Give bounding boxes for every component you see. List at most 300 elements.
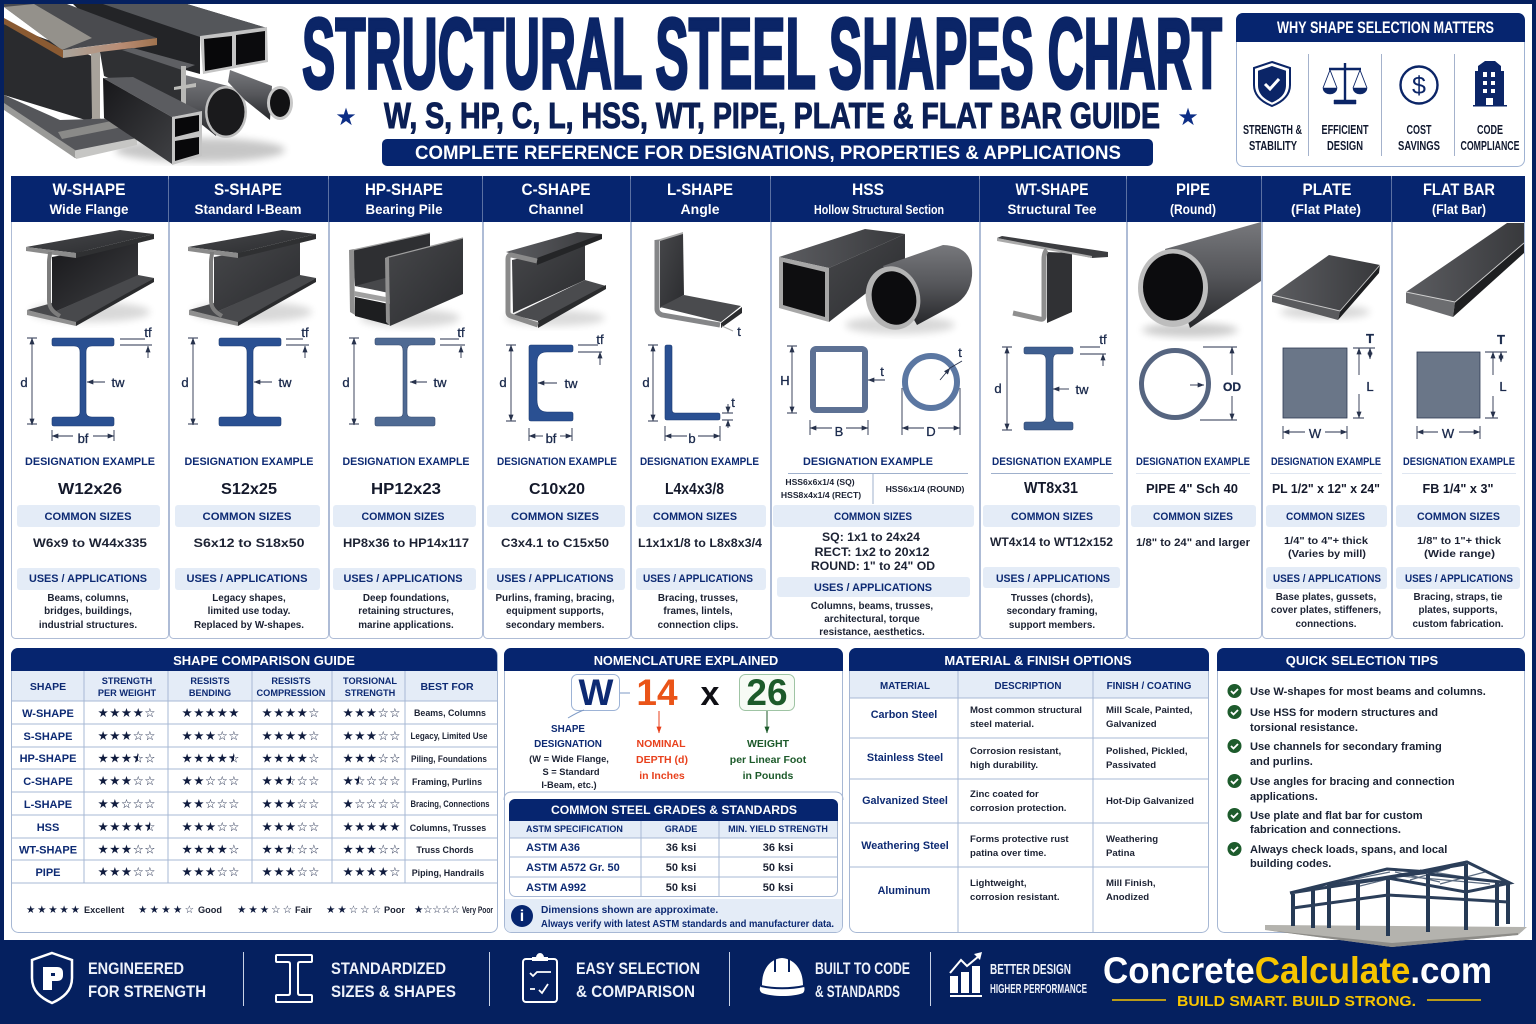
- HSS section diagrams: t: [958, 345, 962, 360]
- footer item: easy selection: EASY SELECTION: [576, 959, 700, 978]
- icon: dollar coin: $: [1412, 72, 1426, 100]
- panel: WT-shape: Structural Tee: [1008, 201, 1097, 217]
- L specifications text: frames, lintels,: [663, 606, 733, 617]
- comparison row: C-shape: ★★★☆☆: [98, 773, 156, 788]
- material table head: DESCRIPTION: [995, 681, 1061, 692]
- logo: ConcreteCalculate.com: ConcreteCalculate.com: [1103, 950, 1492, 991]
- HP section diagram: d: [342, 375, 350, 390]
- comparison row: pipe: ★★★☆☆: [182, 864, 240, 879]
- comparison row: S-shape: ★★★☆☆: [98, 728, 156, 743]
- comparison row: pipe: [35, 864, 484, 879]
- comparison row: HP-shape: ★★★☆☆: [98, 750, 156, 766]
- footer item: built to code: & STANDARDS: [815, 983, 900, 1001]
- icon: building: [1473, 61, 1507, 106]
- tip text: and purlins.: [1250, 756, 1313, 768]
- plate specifications text: [1266, 456, 1387, 630]
- material names: Carbon Steel: [871, 709, 937, 721]
- C specifications text: USES / APPLICATIONS: [496, 573, 614, 585]
- WT specifications text: secondary framing,: [1006, 606, 1098, 617]
- panel: why shape selection matters: [1236, 13, 1525, 166]
- W specifications text: USES / APPLICATIONS: [29, 573, 147, 585]
- S specifications text: Replaced by W-shapes.: [194, 620, 304, 631]
- S specifications text: limited use today.: [208, 606, 291, 617]
- flat bar specifications text: FB 1/4" x 3": [1422, 481, 1494, 496]
- designation W14x26: x: [701, 675, 720, 713]
- 3D flat bar: [1406, 223, 1524, 317]
- panel: L-shape: L-SHAPE: [667, 181, 733, 199]
- plate specifications text: USES / APPLICATIONS: [1273, 573, 1381, 585]
- table: common steel grades and standards: ASTM A992: [526, 882, 586, 894]
- HSS specifications text: Columns, beams, trusses,: [811, 601, 933, 612]
- flat bar specifications text: [1396, 456, 1520, 630]
- comparison row: C-shape: ★★☆☆☆: [262, 773, 320, 788]
- comparison row: HSS: ★★★★★: [342, 819, 400, 834]
- comparison table head: STRENGTH: [102, 676, 153, 686]
- why labels: COST: [1406, 122, 1432, 137]
- HSS specifications text: [773, 456, 974, 638]
- comparison row: WT-shape: [19, 842, 474, 856]
- C specifications text: [487, 456, 625, 631]
- tip text: Use HSS for modern structures and: [1250, 707, 1438, 719]
- plate specifications text: connections.: [1296, 619, 1357, 630]
- why labels: STABILITY: [1249, 138, 1297, 153]
- HSS specifications text: RECT: 1x2 to 20x12: [814, 545, 930, 559]
- comparison table head: STRENGTH: [345, 688, 396, 698]
- material finishes: Passivated: [1106, 760, 1156, 771]
- panel: W-shape: W-SHAPE: [52, 181, 126, 199]
- W section diagram: tf: [144, 325, 152, 340]
- comparison row: L-shape: ★★☆☆☆: [98, 796, 156, 811]
- 3D HSS tubes: [779, 229, 972, 336]
- star rating legend: Very Poor: [462, 905, 493, 915]
- comparison row: C-shape: Framing, Purlins: [412, 777, 482, 787]
- 3D pipe: [1138, 222, 1261, 337]
- comparison row: HP-shape: ★★★★☆: [262, 750, 320, 766]
- W explanation: [529, 724, 609, 790]
- star rating legend: ★★★★★: [26, 904, 80, 916]
- material descriptions: Lightweight,: [970, 878, 1027, 889]
- comparison row: pipe: ★★★☆☆: [98, 864, 156, 879]
- panel: HP-shape: HP-SHAPE: [365, 181, 443, 199]
- material descriptions: corrosion protection.: [970, 803, 1066, 814]
- 3D L-shape: t: [737, 324, 741, 339]
- 3D C-shape: [505, 232, 606, 328]
- 3D W-shape: [26, 230, 154, 326]
- footer bar: [0, 940, 1536, 1024]
- plate section diagram: L: [1366, 379, 1374, 394]
- icon: balance scale: [1323, 63, 1367, 104]
- material descriptions: [970, 705, 1082, 903]
- tip text: torsional resistance.: [1250, 722, 1358, 734]
- why labels: EFFICIENT: [1322, 122, 1369, 137]
- icon: dollar coin: [1400, 66, 1438, 104]
- table: common steel grades and standards: ASTM A36: [526, 842, 580, 854]
- plate specifications text: Base plates, gussets,: [1276, 592, 1376, 603]
- W specifications text: COMMON SIZES: [44, 511, 132, 523]
- flat bar specifications text: custom fabrication.: [1412, 619, 1504, 630]
- panel: flat bar: FLAT BAR: [1423, 181, 1495, 199]
- HSS section diagrams: B: [835, 424, 843, 439]
- comparison row: pipe: ★★★★☆: [342, 864, 400, 879]
- WT specifications text: support members.: [1009, 620, 1095, 631]
- comparison table head: SHAPE: [30, 681, 66, 693]
- why labels: CODE: [1477, 122, 1503, 137]
- star rating legend: Excellent: [84, 905, 124, 915]
- 26 explanation: WEIGHT: [747, 738, 790, 750]
- L section diagram: d: [642, 375, 650, 390]
- panel: C-shape: Channel: [528, 201, 584, 217]
- W specifications text: W12x26: [58, 481, 122, 498]
- subtitle with stars: ★: [1177, 104, 1199, 131]
- tip text: applications.: [1250, 791, 1318, 803]
- comparison row: W-shape: W-SHAPE: [22, 708, 74, 720]
- tip text: building codes.: [1250, 858, 1331, 870]
- footer item: better design: [950, 952, 1087, 997]
- HP specifications text: retaining structures,: [358, 606, 454, 617]
- pipe specifications text: DESIGNATION EXAMPLE: [1136, 456, 1250, 468]
- HSS specifications text: COMMON SIZES: [834, 511, 912, 523]
- C section diagram: [499, 332, 604, 446]
- C specifications text: C3x4.1 to C15x50: [501, 536, 609, 550]
- comparison table head: TORSIONAL: [343, 676, 397, 686]
- panel: flat bar: [1392, 176, 1525, 638]
- 3D L-shape: [655, 232, 742, 339]
- HSS specifications text: resistance, aesthetics.: [819, 627, 925, 638]
- material finishes: Patina: [1106, 848, 1135, 859]
- why labels: STRENGTH &: [1243, 122, 1302, 137]
- comparison table head: RESISTS: [271, 676, 311, 686]
- table: common steel grades and standards: MIN. YIELD STRENGTH: [728, 824, 828, 834]
- W section diagram: [20, 325, 152, 446]
- pipe specifications text: 1/8" to 24" and larger: [1136, 537, 1251, 549]
- plate section diagram: T: [1366, 331, 1374, 346]
- tip text: [1250, 686, 1486, 870]
- comparison table head: BENDING: [189, 688, 231, 698]
- star rating legend: ★★★★☆: [138, 904, 194, 916]
- star rating legend: ★☆☆☆☆: [414, 904, 460, 916]
- material names: Galvanized Steel: [862, 795, 948, 807]
- plate specifications text: 1/4" to 4"+ thick: [1284, 535, 1368, 547]
- panel: nomenclature explained: [504, 648, 843, 932]
- 3D S-shape: [188, 230, 316, 326]
- HP specifications text: HP8x36 to HP14x117: [343, 536, 469, 550]
- W specifications text: DESIGNATION EXAMPLE: [25, 456, 155, 468]
- material descriptions: Most common structural: [970, 705, 1082, 716]
- HSS section diagrams: H: [780, 373, 790, 388]
- HSS section diagrams: t: [880, 364, 884, 379]
- footer item: better design: HIGHER PERFORMANCE: [990, 981, 1087, 996]
- panel: plate: [1262, 176, 1392, 638]
- footer item: engineered for strength: ENGINEERED: [88, 959, 184, 978]
- tip text: Use angles for bracing and connection: [1250, 776, 1455, 788]
- comparison row: L-shape: Bracing, Connections: [410, 799, 490, 809]
- hero image: steel sections: [4, 4, 293, 165]
- L specifications text: DESIGNATION EXAMPLE: [640, 456, 759, 468]
- W specifications text: bridges, buildings,: [44, 606, 132, 617]
- table: common steel grades and standards: 50 ksi: [666, 882, 696, 894]
- star rating legend: Good: [198, 905, 222, 915]
- material names: Stainless Steel: [867, 752, 943, 764]
- footer item: standardized sizes: STANDARDIZED: [331, 959, 446, 978]
- comparison row: W-shape: ★★★☆☆: [342, 705, 400, 720]
- table: common steel grades and standards: GRADE: [665, 824, 697, 834]
- 26 explanation: in Pounds: [743, 770, 794, 782]
- S section diagram: tw: [278, 375, 292, 390]
- reference banner: COMPLETE REFERENCE FOR DESIGNATIONS, PROPERTIES & APPLICATIONS: [415, 143, 1121, 164]
- material table head: MATERIAL: [880, 681, 930, 692]
- tip text: Use plate and flat bar for custom: [1250, 810, 1423, 822]
- footer item: standardized sizes: SIZES & SHAPES: [331, 982, 456, 1001]
- logo: ConcreteCalculate.com: [1103, 950, 1492, 1010]
- material descriptions: patina over time.: [970, 848, 1046, 859]
- S specifications text: DESIGNATION EXAMPLE: [184, 456, 314, 468]
- L specifications text: COMMON SIZES: [653, 511, 737, 523]
- HP specifications text: marine applications.: [358, 620, 454, 631]
- 3D plate: [1272, 255, 1380, 320]
- comparison row: L-shape: ★★★☆☆: [262, 796, 320, 811]
- HP specifications text: USES / APPLICATIONS: [344, 573, 462, 585]
- note: dimensions approximate: Dimensions shown are approximate.: [541, 905, 718, 916]
- subtitle with stars: W, S, HP, C, L, HSS, WT, PIPE, PLATE & FLAT BAR GUIDE: [384, 95, 1160, 136]
- flat bar specifications text: 1/8" to 1"+ thick: [1417, 535, 1501, 547]
- 26 explanation: [730, 738, 807, 782]
- comparison row: WT-shape: ★★★★☆: [182, 842, 240, 856]
- panel: L-shape: [631, 176, 770, 638]
- comparison row: WT-shape: WT-SHAPE: [19, 844, 77, 856]
- C specifications text: Purlins, framing, bracing,: [495, 593, 615, 604]
- comparison table head: COMPRESSION: [257, 688, 326, 698]
- W explanation: S = Standard: [542, 767, 600, 777]
- L specifications text: [636, 456, 766, 631]
- W explanation: (W = Wide Flange,: [529, 754, 609, 764]
- HSS specifications text: ROUND: 1" to 24" OD: [811, 559, 935, 573]
- comparison row: S-shape: S-SHAPE: [24, 731, 72, 743]
- material descriptions: Forms protective rust: [970, 834, 1069, 845]
- table: common steel grades and standards: COMMON STEEL GRADES & STANDARDS: [551, 803, 797, 817]
- comparison row: C-shape: C-SHAPE: [23, 776, 73, 788]
- C specifications text: COMMON SIZES: [511, 511, 599, 523]
- panel: S-shape: S-SHAPE: [214, 181, 282, 199]
- comparison row: WT-shape: ★★★☆☆: [342, 842, 400, 856]
- comparison row: L-shape: L-SHAPE: [24, 799, 72, 811]
- C specifications text: secondary members.: [506, 620, 605, 631]
- flat bar section diagram: W: [1442, 426, 1455, 441]
- material descriptions: corrosion resistant.: [970, 892, 1060, 903]
- HSS specifications text: architectural, torque: [824, 614, 920, 625]
- HSS specifications text: DESIGNATION EXAMPLE: [803, 456, 933, 468]
- material finishes: Mill Finish,: [1106, 878, 1156, 889]
- star rating legend: Fair: [295, 905, 312, 915]
- comparison row: HP-shape: [20, 750, 487, 766]
- comparison row: HP-shape: ★★★★☆: [182, 750, 240, 766]
- panel: W-shape: [11, 176, 168, 638]
- footer item: easy selection: [523, 953, 700, 1002]
- table: common steel grades and standards: ASTM A572 Gr. 50: [526, 862, 620, 874]
- comparison table head: PER WEIGHT: [98, 688, 156, 698]
- WT section diagram: tf: [1099, 332, 1107, 347]
- footer item: better design: BETTER DESIGN: [990, 961, 1071, 978]
- footer item: engineered for strength: FOR STRENGTH: [88, 982, 206, 1001]
- table: common steel grades and standards: [504, 792, 843, 896]
- C section diagram: d: [499, 375, 507, 390]
- panel: shape comparison guide: SHAPE COMPARISON GUIDE: [173, 653, 355, 668]
- material names: Weathering Steel: [861, 840, 949, 852]
- panel: HP-shape: Bearing Pile: [366, 201, 443, 217]
- C specifications text: equipment supports,: [506, 606, 604, 617]
- W explanation: SHAPE: [551, 724, 585, 735]
- W specifications text: W6x9 to W44x335: [33, 536, 147, 550]
- plate section diagram: [1283, 331, 1375, 441]
- HSS specifications text: SQ: 1x1 to 24x24: [822, 530, 920, 544]
- comparison row: HSS: Columns, Trusses: [410, 823, 486, 833]
- panel: HP-shape: [329, 176, 482, 638]
- why labels: [1243, 122, 1520, 153]
- tip text: Always check loads, spans, and local: [1250, 844, 1447, 856]
- material descriptions: Zinc coated for: [970, 789, 1039, 800]
- plate specifications text: COMMON SIZES: [1286, 511, 1365, 523]
- comparison row: W-shape: ★★★★☆: [262, 705, 320, 720]
- 14 explanation: in Inches: [639, 770, 685, 782]
- star rating legend: ★★☆☆☆: [326, 904, 381, 916]
- designation W14x26: 26: [746, 672, 788, 713]
- comparison row: pipe: PIPE: [35, 867, 61, 879]
- HP specifications text: COMMON SIZES: [362, 511, 444, 523]
- table: common steel grades and standards: 50 ksi: [763, 862, 793, 874]
- tip check icons: [1228, 684, 1242, 856]
- panel: WT-shape: WT-SHAPE: [1016, 181, 1088, 199]
- table: common steel grades and standards: ASTM SPECIFICATION: [526, 824, 623, 834]
- tip text: Use channels for secondary framing: [1250, 741, 1442, 753]
- table: common steel grades and standards: 50 ksi: [666, 862, 696, 874]
- subtitle with stars: ★: [335, 104, 357, 131]
- W section diagram: bf: [78, 431, 89, 446]
- comparison row: S-shape: ★★★☆☆: [182, 728, 240, 743]
- footer item: engineered for strength: [32, 953, 206, 1003]
- illustration: steel building frame: [1265, 862, 1527, 947]
- designation W14x26: 14: [636, 672, 678, 713]
- panel: WT-shape: [980, 176, 1126, 638]
- panel: W-shape: Wide Flange: [50, 201, 129, 217]
- panel: HSS: HSS: [852, 181, 884, 199]
- footer item: easy selection: & COMPARISON: [576, 982, 695, 1001]
- comparison row: HSS: HSS: [37, 822, 59, 834]
- panel: pipe: (Round): [1170, 201, 1216, 217]
- panel: nomenclature explained: NOMENCLATURE EXPLAINED: [594, 653, 778, 668]
- flat bar section diagram: T: [1497, 332, 1505, 347]
- WT specifications text: WT8x31: [1024, 480, 1078, 497]
- S specifications text: USES / APPLICATIONS: [186, 573, 308, 585]
- comparison row: C-shape: [23, 773, 482, 788]
- plate specifications text: DESIGNATION EXAMPLE: [1271, 456, 1381, 468]
- flat bar specifications text: (Wide range): [1424, 548, 1495, 560]
- comparison row: S-shape: Legacy, Limited Use: [410, 731, 488, 741]
- WT specifications text: [983, 456, 1120, 631]
- comparison row: C-shape: ★☆☆☆☆: [342, 773, 400, 788]
- comparison row: HSS: ★★★☆☆: [262, 819, 320, 834]
- comparison row: HP-shape: ★★★☆☆: [342, 750, 400, 766]
- WT section diagram: tw: [1076, 382, 1089, 397]
- star rating legend: ★★★☆☆: [237, 904, 292, 916]
- comparison row: pipe: Piping, Handrails: [412, 868, 484, 878]
- comparison row: S-shape: [24, 728, 488, 743]
- material descriptions: high durability.: [970, 760, 1038, 771]
- pipe specifications text: [1131, 456, 1256, 549]
- flat bar specifications text: plates, supports,: [1418, 605, 1498, 616]
- panel: plate: (Flat Plate): [1291, 201, 1361, 217]
- table: common steel grades and standards: 36 ksi: [763, 842, 793, 854]
- L specifications text: L4x4x3/8: [665, 481, 724, 498]
- material finishes: Hot-Dip Galvanized: [1106, 796, 1194, 807]
- tip text: Use W-shapes for most beams and columns.: [1250, 686, 1486, 698]
- comparison row: WT-shape: Truss Chords: [416, 845, 474, 855]
- note: dimensions approximate: i: [520, 908, 524, 925]
- HP specifications text: DESIGNATION EXAMPLE: [342, 456, 470, 468]
- S specifications text: [175, 456, 320, 631]
- material names: Aluminum: [878, 885, 930, 897]
- material descriptions: Corrosion resistant,: [970, 746, 1061, 757]
- flat bar specifications text: USES / APPLICATIONS: [1405, 573, 1513, 585]
- W section diagram: d: [20, 375, 28, 390]
- table: common steel grades and standards: 36 ksi: [666, 842, 696, 854]
- note: dimensions approximate: Always verify with latest ASTM standards and manufacturer data.: [541, 919, 834, 930]
- L specifications text: USES / APPLICATIONS: [643, 573, 753, 585]
- comparison row: HSS: ★★★☆☆: [182, 819, 240, 834]
- HSS specifications text: HSS6x1/4 (ROUND): [886, 484, 965, 494]
- WT specifications text: DESIGNATION EXAMPLE: [992, 456, 1112, 468]
- L specifications text: L1x1x1/8 to L8x8x3/4: [638, 536, 762, 550]
- WT specifications text: WT4x14 to WT12x152: [990, 535, 1113, 549]
- flat bar specifications text: Bracing, straps, tie: [1414, 592, 1503, 603]
- 14 explanation: [636, 738, 688, 782]
- comparison row: W-shape: ★★★★☆: [98, 705, 156, 720]
- icon: shield: [1254, 62, 1290, 106]
- HSS specifications text: USES / APPLICATIONS: [814, 582, 932, 594]
- comparison row: HSS: ★★★★☆: [98, 819, 156, 834]
- HP specifications text: [333, 456, 476, 631]
- note: dimensions approximate: [505, 899, 842, 932]
- WT specifications text: COMMON SIZES: [1011, 511, 1093, 523]
- HP section diagram: tw: [434, 375, 447, 390]
- comparison row: WT-shape: ★★★☆☆: [98, 842, 156, 856]
- material finishes: Mill Scale, Painted,: [1106, 705, 1193, 716]
- WT specifications text: Trusses (chords),: [1011, 593, 1093, 604]
- C section diagram: bf: [546, 431, 557, 446]
- panel: S-shape: [169, 176, 328, 638]
- S section diagram: [181, 325, 309, 426]
- HSS specifications text: HSS6x6x1/4 (SQ): [785, 477, 855, 487]
- panel: HSS: [771, 176, 980, 638]
- footer item: standardized sizes: [276, 955, 456, 1002]
- HSS section diagrams: [780, 345, 962, 439]
- C specifications text: DESIGNATION EXAMPLE: [497, 456, 617, 468]
- W specifications text: [17, 456, 160, 631]
- S specifications text: COMMON SIZES: [202, 511, 292, 523]
- panel: shape comparison guide: [11, 648, 498, 932]
- pipe specifications text: COMMON SIZES: [1153, 511, 1233, 523]
- designation W14x26: [568, 672, 794, 733]
- material finishes: Polished, Pickled,: [1106, 746, 1188, 757]
- L section diagram: b: [688, 431, 696, 446]
- why labels: DESIGN: [1327, 138, 1363, 153]
- L specifications text: Bracing, trusses,: [658, 593, 738, 604]
- logo: ConcreteCalculate.com: BUILD SMART. BUILD STRONG.: [1177, 994, 1416, 1010]
- flat bar section diagram: L: [1499, 379, 1507, 394]
- material descriptions: steel material.: [970, 719, 1034, 730]
- S specifications text: S6x12 to S18x50: [194, 536, 305, 550]
- panel: pipe: PIPE: [1176, 181, 1210, 199]
- panel: quick selection tips: QUICK SELECTION TIPS: [1286, 653, 1439, 668]
- comparison table head: RESISTS: [190, 676, 230, 686]
